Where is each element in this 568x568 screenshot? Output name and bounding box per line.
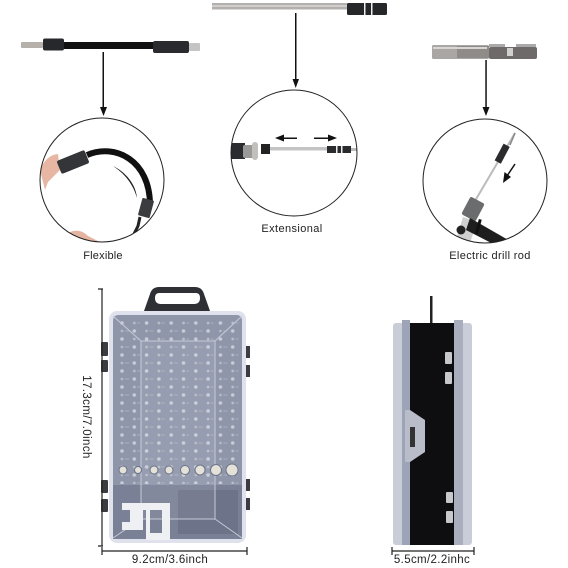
arrow: pull left xyxy=(275,134,297,142)
inner lid frame xyxy=(113,316,242,538)
icon: left clips xyxy=(101,342,108,512)
icon: flexible shaft tool xyxy=(21,38,200,53)
panel: flexible shaft xyxy=(21,38,200,262)
label: Flexible: Flexible xyxy=(83,250,123,262)
arrow: drill rod xyxy=(482,60,490,116)
dimension: depth xyxy=(392,547,474,566)
arrow: flexible xyxy=(100,52,107,116)
panel: extensional shaft xyxy=(212,3,387,235)
panel: case side view xyxy=(392,296,474,566)
icon: drill rod close-up circle xyxy=(423,119,547,250)
arrow: drill direction xyxy=(503,164,515,183)
latch tab xyxy=(405,410,425,462)
icon: flexible shaft close-up circle xyxy=(40,118,164,243)
panel: case front view xyxy=(80,287,250,566)
panel: electric drill rod xyxy=(423,44,547,262)
icon: extensional shaft tool xyxy=(212,3,387,15)
dimension: depth: 5.5cm/2.2inhc xyxy=(394,554,470,566)
dimension: width: 9.2cm/3.6inch xyxy=(132,554,208,566)
icon: extensional close-up circle xyxy=(231,90,357,216)
arrow: pull right xyxy=(314,134,337,142)
icon: right clips xyxy=(246,346,250,510)
dimension: width xyxy=(102,547,247,566)
label: Electric drill rod: Electric drill rod xyxy=(449,250,531,262)
icon: case body with bit slots xyxy=(109,311,246,543)
label: Extensional: Extensional xyxy=(261,223,323,235)
dimension: height: 17.3cm/7.0inch xyxy=(80,375,92,459)
icon: hook xyxy=(430,296,432,324)
white bit holder xyxy=(122,503,170,540)
large bit sockets row xyxy=(119,464,238,476)
arrow: extensional xyxy=(292,13,299,88)
icon: hang tab xyxy=(144,287,210,311)
icon: drill rod tool xyxy=(432,44,537,59)
icon: case side body xyxy=(393,320,472,545)
dimension: height xyxy=(80,289,103,546)
clips xyxy=(445,352,453,523)
